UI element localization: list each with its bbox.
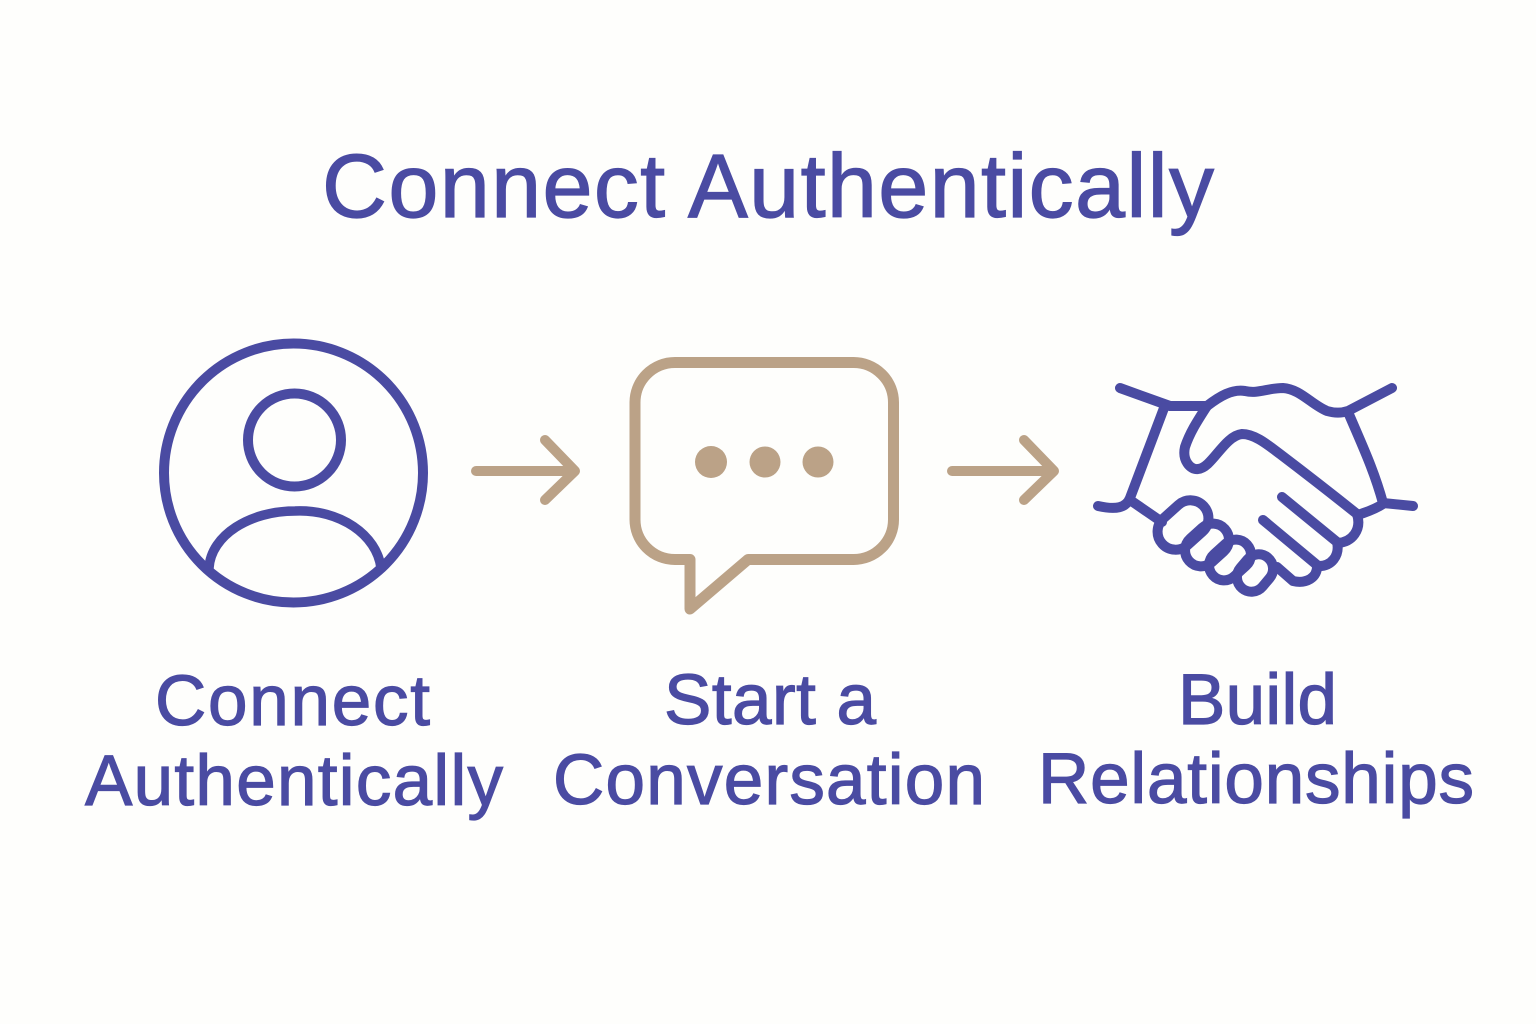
label: connect authentically: Connect <box>155 662 430 741</box>
label: connect authentically: Authentically <box>85 742 504 821</box>
arrow: connect to conversation <box>476 440 575 500</box>
label: connect authentically <box>85 662 504 821</box>
label: start a conversation: Start a <box>664 661 876 740</box>
icon: person in circle <box>164 344 423 602</box>
title: Connect Authentically <box>322 137 1214 237</box>
label: build relationships: Build <box>1178 661 1337 740</box>
icon: speech bubble <box>635 362 894 609</box>
arrow: conversation to relationships <box>952 440 1054 500</box>
label: build relationships <box>1038 661 1474 819</box>
label: start a conversation <box>553 661 985 820</box>
icon: handshake <box>1098 388 1413 598</box>
label: build relationships: Relationships <box>1038 740 1474 819</box>
label: start a conversation: Conversation <box>553 741 985 820</box>
